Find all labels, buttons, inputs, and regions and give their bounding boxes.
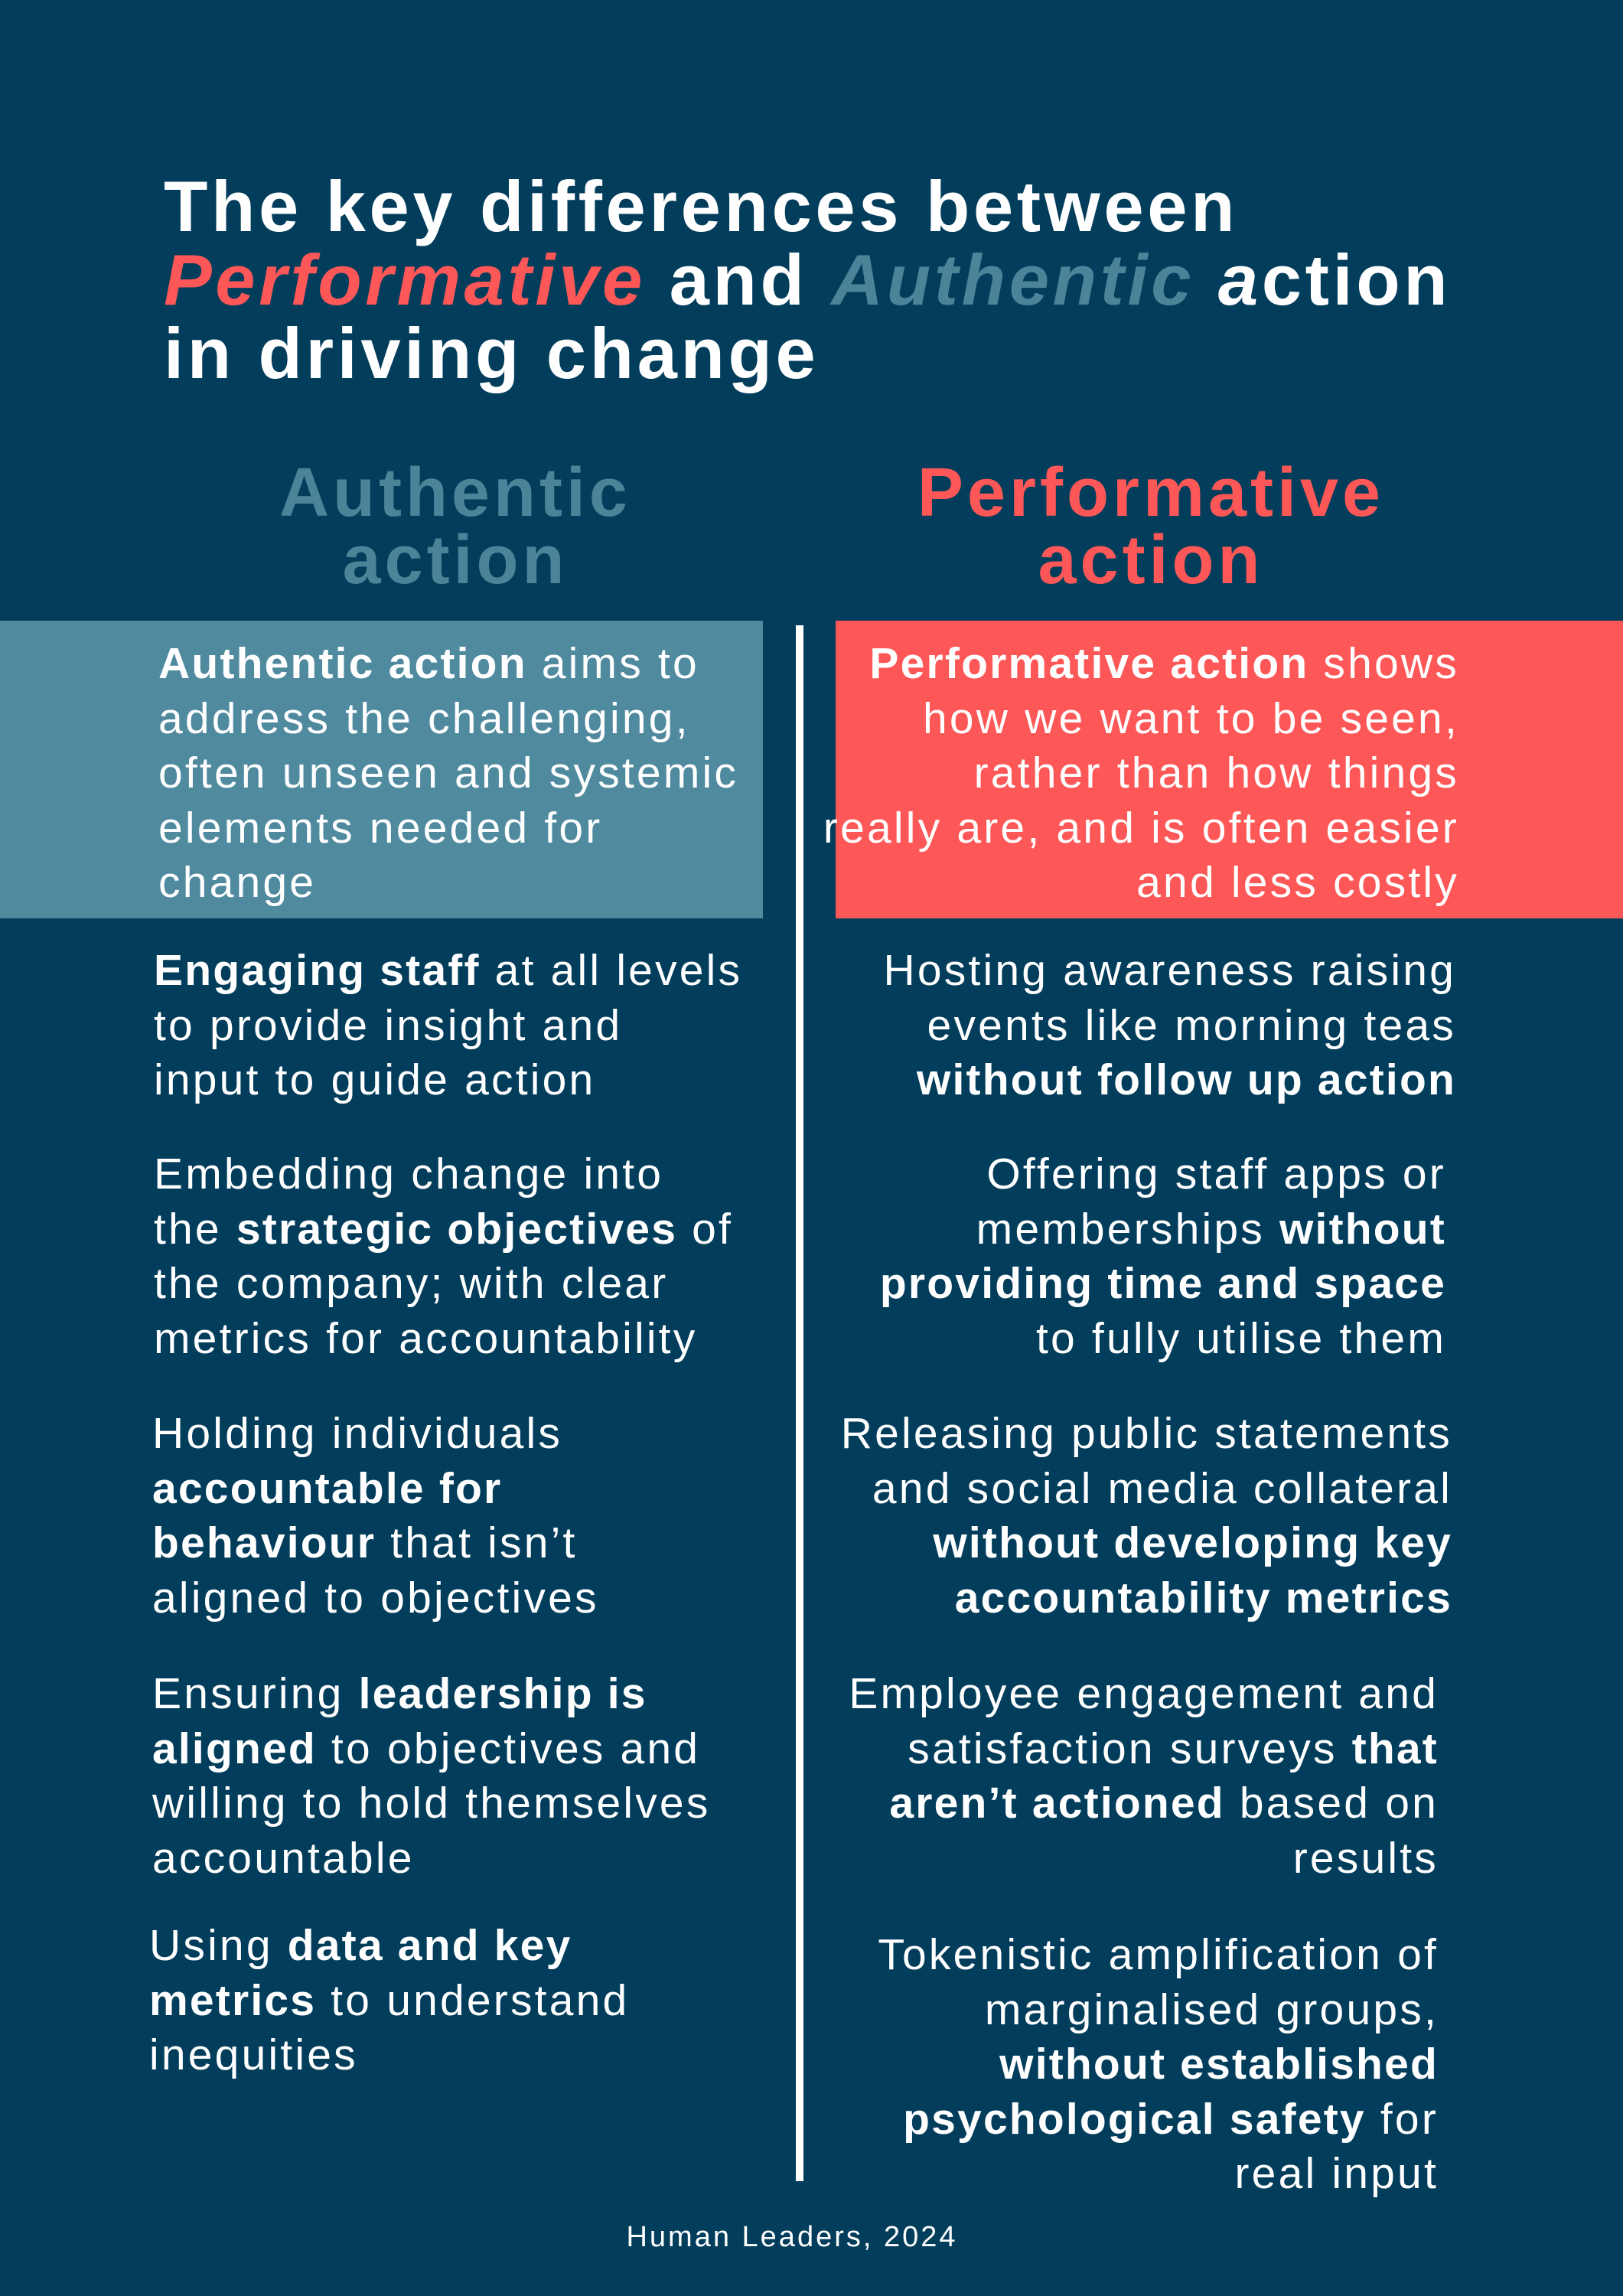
authentic item 2 [154,1150,733,1362]
performative item 2: memberships without [976,1205,1446,1254]
heading: authentic [279,455,631,598]
heading: authentic: Authentic [279,455,631,531]
authentic item 1: input to guide action [154,1055,595,1104]
authentic item 2: the strategic objectives of [154,1205,733,1254]
performative item 1 [883,946,1456,1104]
title: Performative and Authentic action [164,240,1451,320]
authentic item 2: the company; with clear [154,1259,668,1308]
authentic item 4: accountable [152,1834,415,1883]
authentic item 3: aligned to objectives [152,1574,599,1623]
authentic item 3: accountable for [152,1463,502,1512]
authentic item 5: metrics to understand [149,1976,629,2025]
panel: performative definition: really are, and is often easier [823,804,1459,853]
performative item 3: without developing key [933,1518,1452,1567]
heading: performative [917,455,1384,598]
authentic item 4: Ensuring leadership is [152,1669,647,1718]
performative item 2: providing time and space [880,1259,1446,1308]
performative item 5: real input [1235,2149,1439,2198]
authentic item 5: inequities [149,2030,358,2079]
authentic item 1: Engaging staff at all levels [154,946,742,995]
performative item 4 [849,1669,1439,1883]
performative item 5: marginalised groups, [985,1985,1439,2034]
authentic item 2: Embedding change into [154,1150,663,1199]
panel: authentic definition: often unseen and systemic [158,748,738,797]
authentic item 3: behaviour that isn’t [152,1518,578,1567]
authentic item 4 [152,1669,711,1883]
performative item 1: without follow up action [917,1055,1456,1104]
performative item 1: Hosting awareness raising [883,946,1456,995]
panel: performative definition: rather than how things [974,748,1459,797]
performative item 2 [880,1150,1446,1362]
authentic item 4: willing to hold themselves [152,1779,711,1828]
panel: performative definition: how we want to be seen, [923,693,1459,742]
performative item 3 [841,1409,1452,1623]
panel: performative definition: Performative action shows [869,639,1459,688]
heading: performative: action [1038,522,1264,598]
heading: performative: Performative [917,455,1384,531]
performative item 1: events like morning teas [927,1001,1456,1050]
performative item 5: without established [999,2040,1439,2089]
authentic item 5 [149,1921,629,2079]
authentic item 3: Holding individuals [152,1409,562,1458]
performative item 3: and social media collateral [872,1463,1452,1512]
performative item 4: Employee engagement and [849,1669,1439,1718]
panel: authentic definition: Authentic action aims to [158,639,699,688]
authentic item 1 [154,946,742,1104]
title [164,166,1451,393]
panel: authentic definition: elements needed for [158,804,602,853]
authentic item 3 [152,1409,599,1623]
panel: authentic definition: change [158,858,316,907]
authentic item 5: Using data and key [149,1921,572,1970]
authentic item 1: to provide insight and [154,1001,622,1050]
panel: authentic definition [0,621,763,918]
performative item 5: Tokenistic amplification of [878,1930,1439,1979]
divider [796,625,803,2181]
authentic item 2: metrics for accountability [154,1313,697,1362]
heading: authentic: action [342,522,569,598]
performative item 2: to fully utilise them [1036,1313,1446,1362]
performative item 5 [878,1930,1439,2198]
performative item 4: aren’t actioned based on [889,1779,1439,1828]
title: in driving change [164,313,819,393]
title: The key differences between [164,166,1238,246]
performative item 3: Releasing public statements [841,1409,1452,1458]
panel: performative definition [836,621,1623,918]
panel: authentic definition: address the challenging, [158,693,690,742]
authentic item 4: aligned to objectives and [152,1724,700,1773]
performative item 3: accountability metrics [955,1574,1452,1623]
panel: performative definition: and less costly [1136,858,1459,907]
performative item 4: results [1293,1834,1439,1883]
performative item 5: psychological safety for [903,2094,1439,2143]
performative item 4: satisfaction surveys that [908,1724,1439,1773]
performative item 2: Offering staff apps or [986,1150,1446,1199]
footer source: Human Leaders, 2024 [626,2221,958,2253]
